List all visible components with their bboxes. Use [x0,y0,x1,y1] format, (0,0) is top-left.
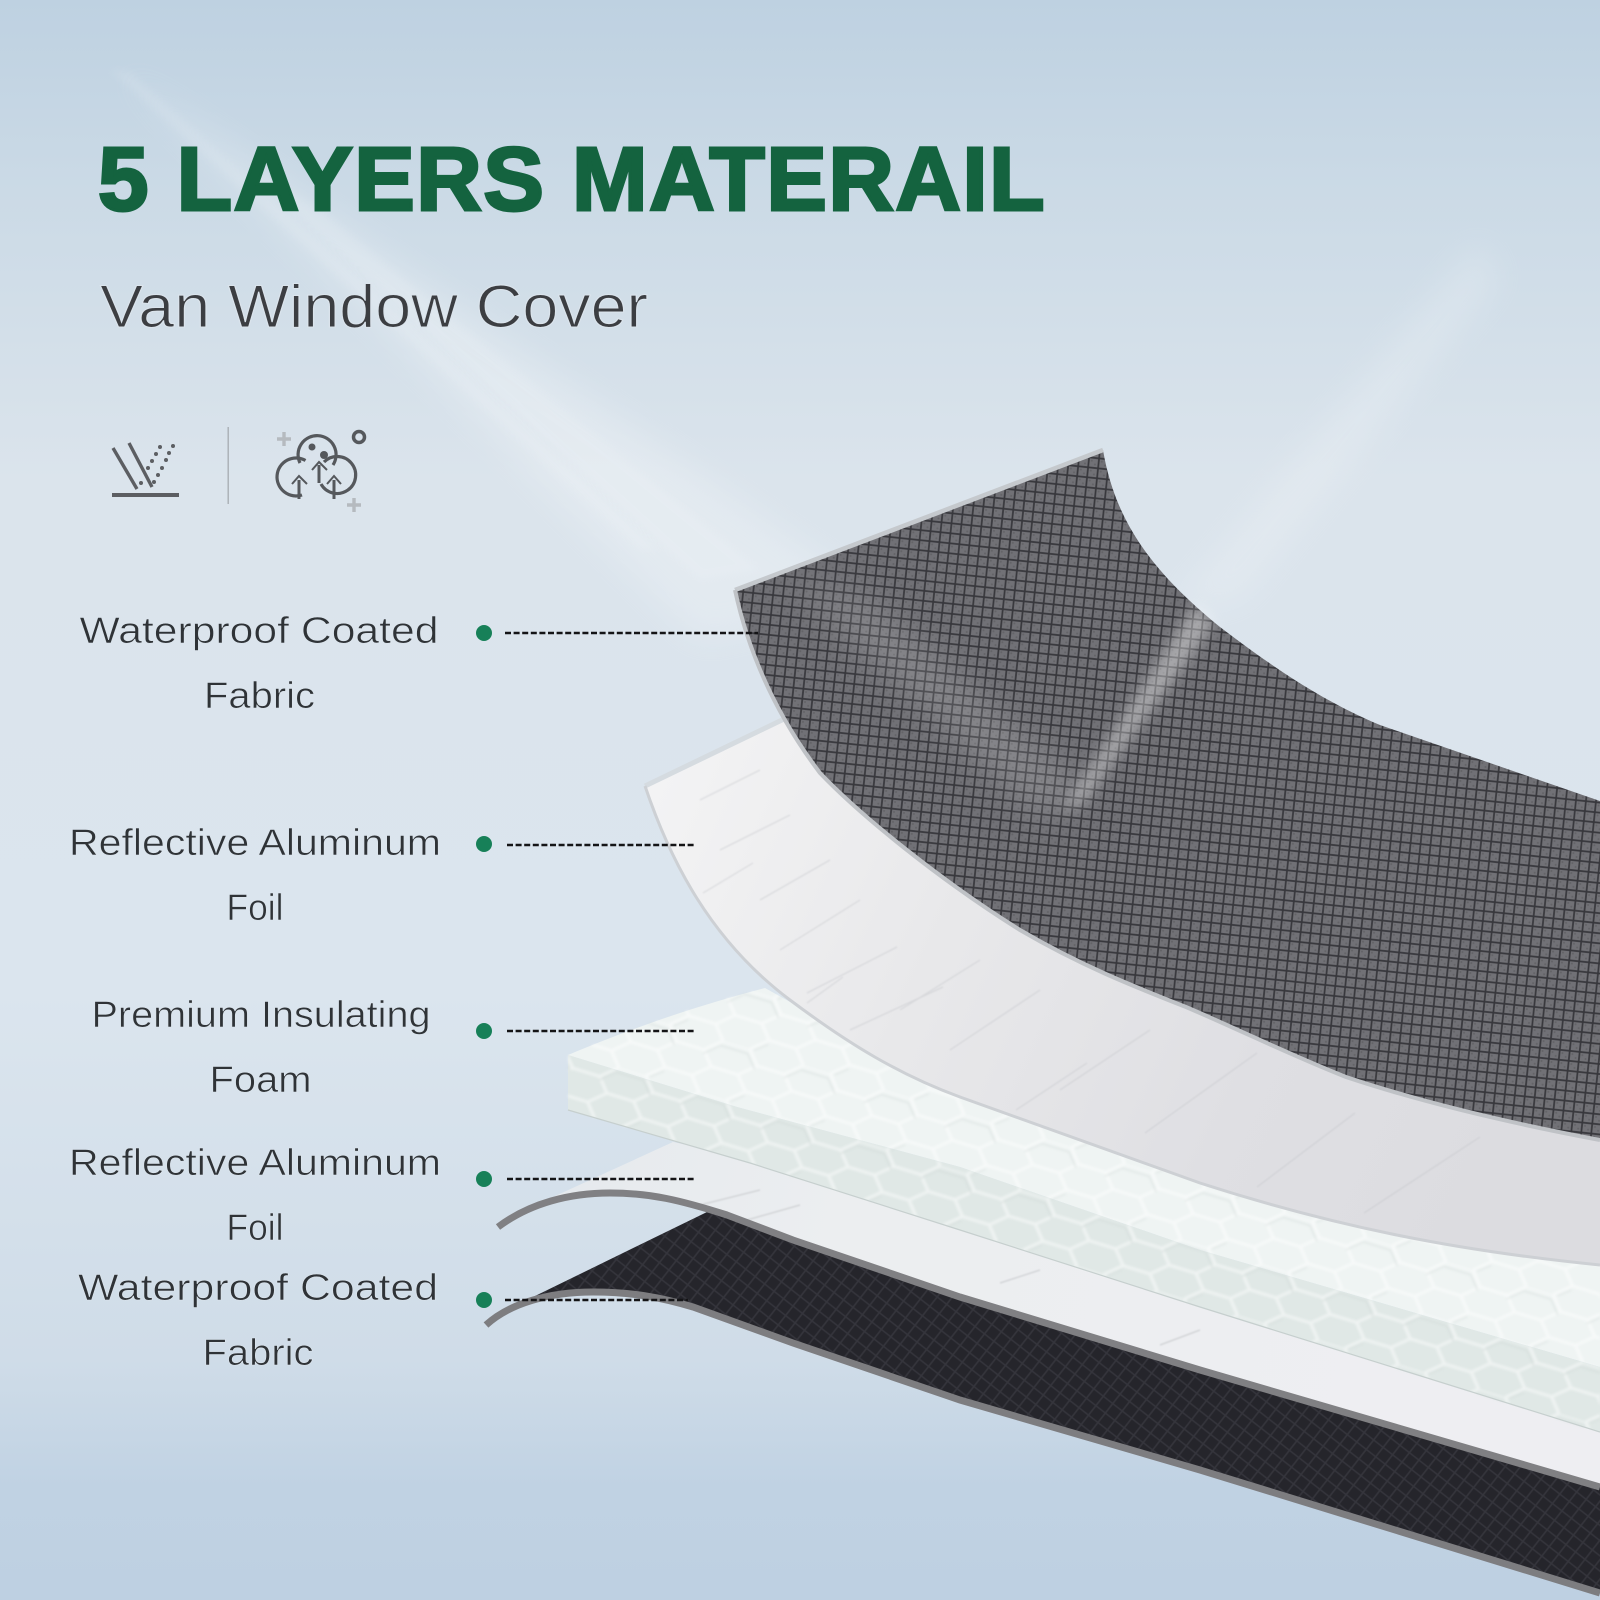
layer: lower reflective foil [498,1142,1600,1487]
icon divider [228,427,229,504]
title: 5 LAYERS MATERAIL [98,130,1046,230]
label: reflective aluminum foil upper: Reflective Aluminum [69,822,441,863]
label: reflective aluminum foil lower: Reflective Aluminum [69,1142,441,1183]
label: reflective aluminum foil lower: Foil [226,1207,284,1248]
icon: waterproof [112,443,179,497]
layer: insulating foam [568,988,1600,1432]
label: reflective aluminum foil upper: Foil [226,887,284,928]
label: waterproof coated fabric bottom: Fabric [202,1332,314,1373]
label: premium insulating foam: Premium Insulating [92,994,430,1035]
light rays [110,70,1500,640]
label: premium insulating foam: Foam [210,1059,312,1100]
label: waterproof coated fabric top: Fabric [204,675,315,716]
layer: bottom waterproof fabric [486,1212,1600,1593]
layer: top waterproof fabric [735,450,1600,1140]
callout markers and leader lines [476,625,758,1308]
label: waterproof coated fabric bottom: Waterproof Coated [78,1267,438,1308]
subtitle: Van Window Cover [100,273,648,340]
layer: upper reflective foil [645,719,1600,1265]
icon: air cooling clouds [277,432,364,512]
label: waterproof coated fabric top: Waterproof Coated [80,610,438,651]
